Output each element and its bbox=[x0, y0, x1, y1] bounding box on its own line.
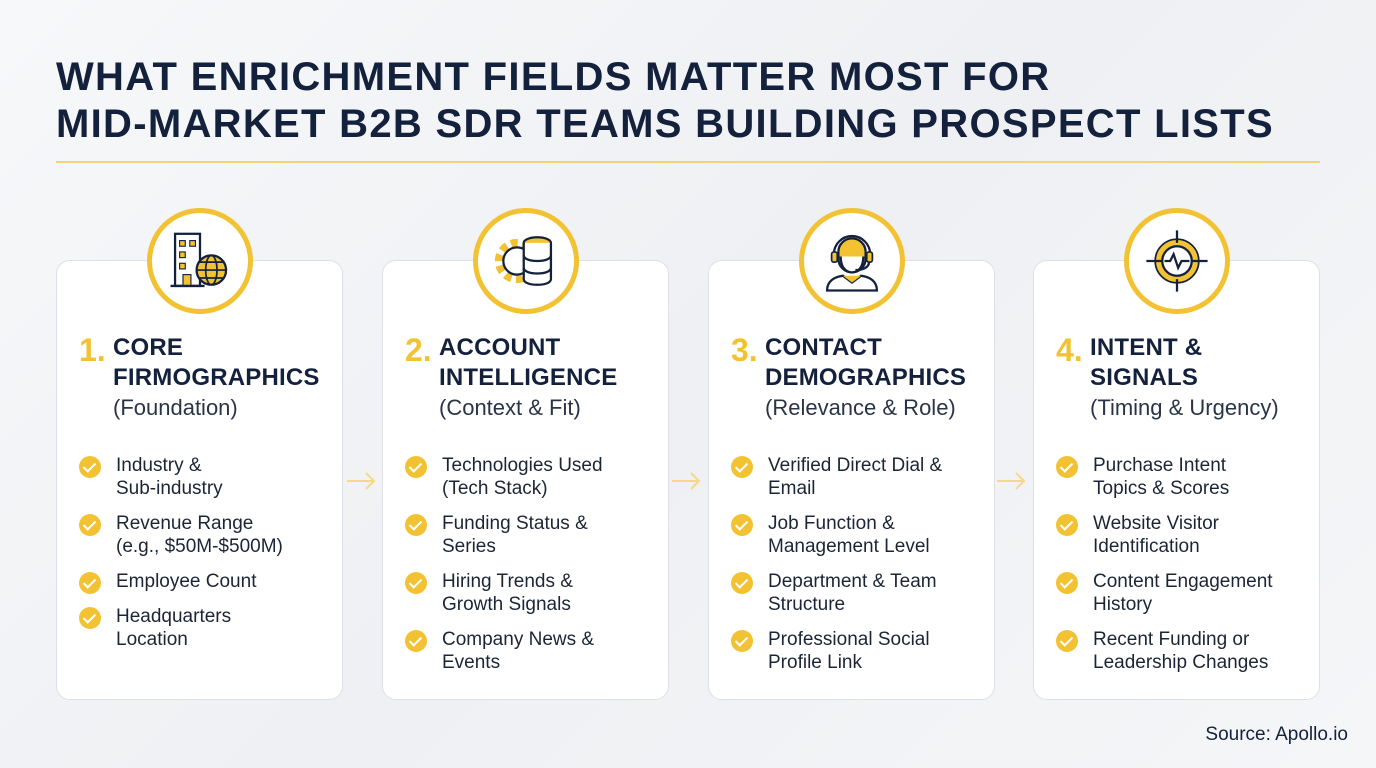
list: Topics & Scores bbox=[1093, 478, 1229, 499]
panel: account intelligence bbox=[382, 260, 669, 700]
list: (e.g., $50M-$500M) bbox=[116, 536, 283, 557]
list: Identification bbox=[1093, 536, 1200, 557]
panel: account intelligence: INTELLIGENCE bbox=[439, 364, 617, 391]
list: Recent Funding or bbox=[1093, 629, 1249, 650]
list: Department & Team bbox=[768, 571, 937, 592]
panel: intent & signals: (Timing & Urgency) bbox=[1090, 395, 1279, 420]
title: MID-MARKET B2B SDR TEAMS BUILDING PROSPECT LISTS bbox=[56, 102, 1274, 146]
list: Hiring Trends & bbox=[442, 571, 573, 592]
list: Email bbox=[768, 478, 816, 499]
list: Sub-industry bbox=[116, 478, 223, 499]
panel: core firmographics: FIRMOGRAPHICS bbox=[113, 364, 320, 391]
list: Growth Signals bbox=[442, 594, 571, 615]
panel: core firmographics bbox=[56, 260, 343, 700]
list: Funding Status & bbox=[442, 513, 588, 534]
list: Location bbox=[116, 629, 188, 650]
list: Professional Social bbox=[768, 629, 930, 650]
arrow bbox=[347, 472, 376, 490]
list: Revenue Range bbox=[116, 513, 253, 534]
arrow bbox=[997, 472, 1026, 490]
list bbox=[405, 455, 603, 673]
panel: contact demographics: CONTACT bbox=[765, 334, 882, 361]
list: Employee Count bbox=[116, 571, 256, 592]
list bbox=[1056, 455, 1273, 673]
panel: intent & signals: 4. bbox=[1056, 332, 1083, 368]
list: Job Function & bbox=[768, 513, 895, 534]
list bbox=[79, 455, 283, 650]
list: Verified Direct Dial & bbox=[768, 455, 942, 476]
icon: target pulse bbox=[1124, 208, 1230, 314]
heading bbox=[405, 332, 617, 420]
panel: contact demographics: 3. bbox=[731, 332, 758, 368]
list: Technologies Used bbox=[442, 455, 603, 476]
list: Structure bbox=[768, 594, 845, 615]
panel: intent & signals: INTENT & bbox=[1090, 334, 1202, 361]
heading bbox=[1056, 332, 1279, 420]
list bbox=[731, 455, 942, 673]
list: (Tech Stack) bbox=[442, 478, 548, 499]
list: Profile Link bbox=[768, 652, 862, 673]
icon: gear database bbox=[473, 208, 579, 314]
icon: headset person bbox=[799, 208, 905, 314]
list: Company News & bbox=[442, 629, 594, 650]
panel: core firmographics: CORE bbox=[113, 334, 183, 361]
panel: contact demographics bbox=[708, 260, 995, 700]
panel: core firmographics: 1. bbox=[79, 332, 106, 368]
list: Series bbox=[442, 536, 496, 557]
panel: intent & signals: SIGNALS bbox=[1090, 364, 1198, 391]
panel: intent & signals bbox=[1033, 260, 1320, 700]
arrow bbox=[672, 472, 700, 490]
panel: contact demographics: (Relevance & Role) bbox=[765, 395, 956, 420]
heading bbox=[731, 332, 966, 420]
panel: contact demographics: DEMOGRAPHICS bbox=[765, 364, 966, 391]
panel: core firmographics: (Foundation) bbox=[113, 395, 238, 420]
title bbox=[56, 55, 1274, 146]
icon: building globe bbox=[147, 208, 253, 314]
source: Source: Apollo.io bbox=[1205, 724, 1348, 745]
panel: account intelligence: ACCOUNT bbox=[439, 334, 560, 361]
list: Headquarters bbox=[116, 606, 231, 627]
list: Events bbox=[442, 652, 500, 673]
list: Industry & bbox=[116, 455, 202, 476]
list: Content Engagement bbox=[1093, 571, 1273, 592]
title: WHAT ENRICHMENT FIELDS MATTER MOST FOR bbox=[56, 55, 1050, 99]
list: Management Level bbox=[768, 536, 930, 557]
list: Purchase Intent bbox=[1093, 455, 1226, 476]
list: Website Visitor bbox=[1093, 513, 1219, 534]
panel: account intelligence: 2. bbox=[405, 332, 432, 368]
list: History bbox=[1093, 594, 1152, 615]
heading bbox=[79, 332, 320, 420]
list: Leadership Changes bbox=[1093, 652, 1268, 673]
panel: account intelligence: (Context & Fit) bbox=[439, 395, 581, 420]
